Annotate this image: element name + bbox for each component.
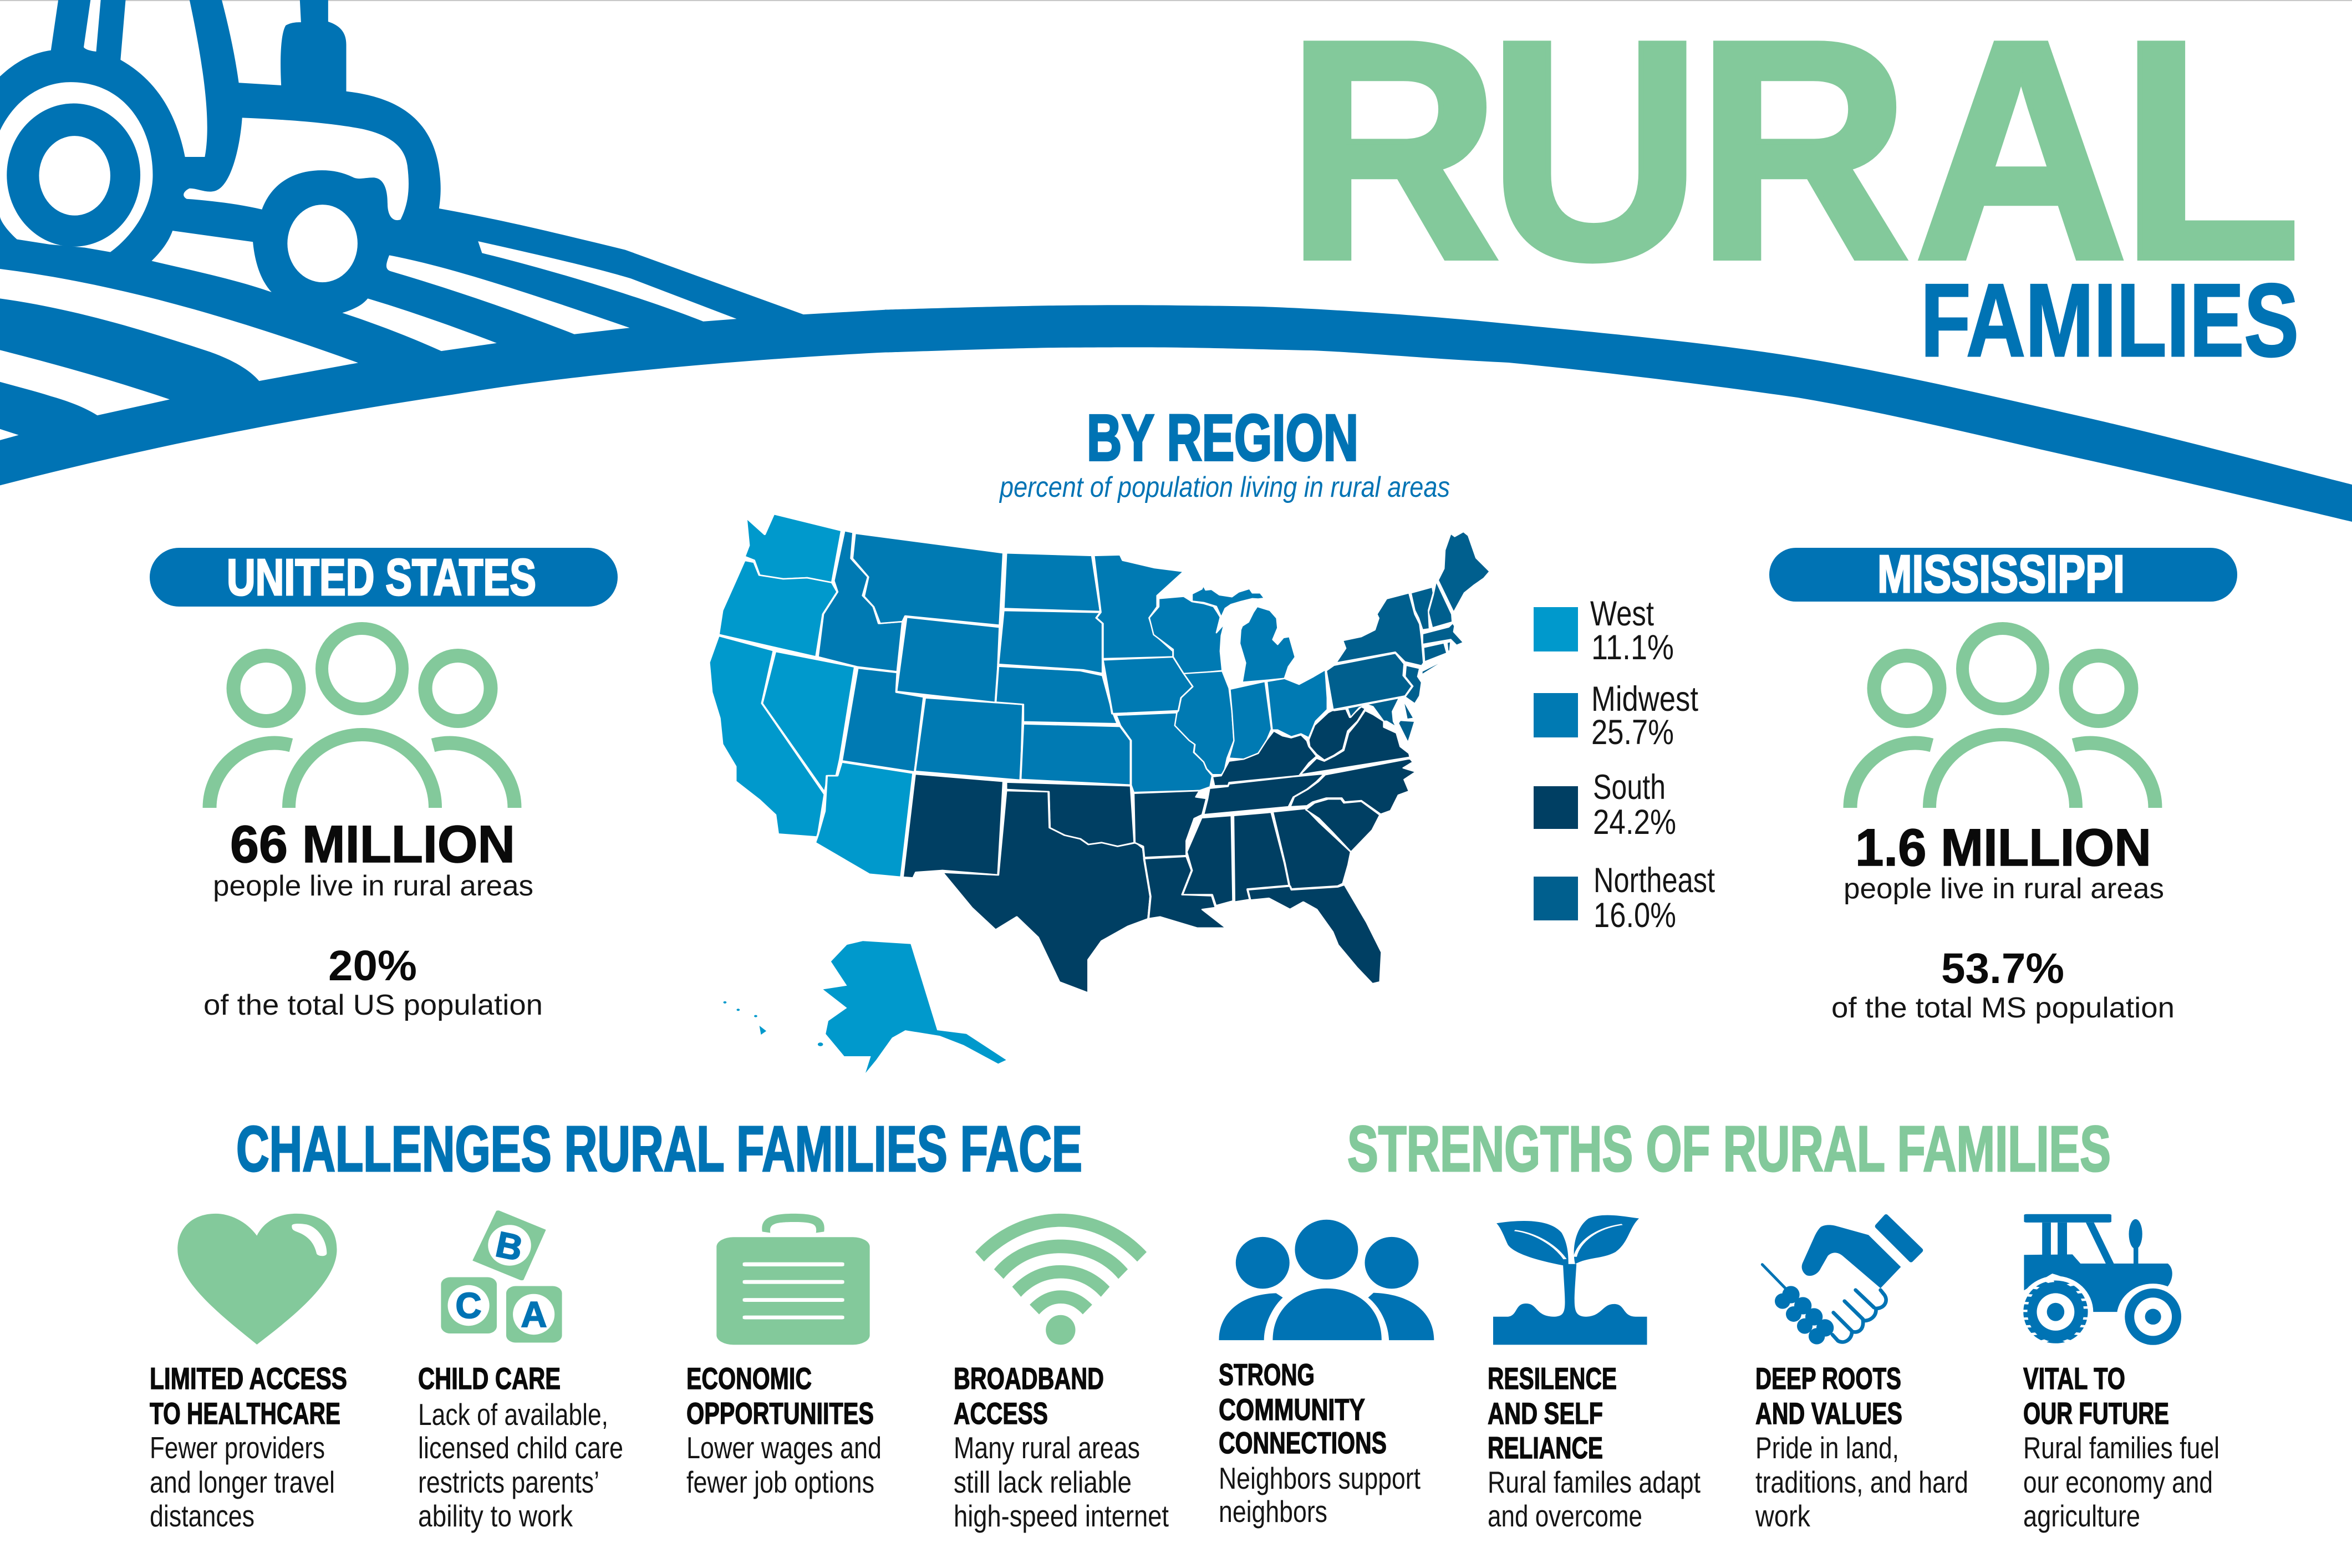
text: economic opportunities: OPPORTUNIITES [686, 1396, 874, 1430]
text: broadband access: Many rural areas [954, 1430, 1140, 1465]
text: resilience and self reliance: AND SELF [1488, 1396, 1603, 1430]
icon: tractor [2018, 1214, 2190, 1350]
text: limited access to healthcare: distances [150, 1499, 254, 1533]
text: vital to our future: OUR FUTURE [2023, 1396, 2169, 1430]
west states [709, 514, 1006, 1073]
stat: 53.7%: 53.7% [1941, 945, 2064, 992]
legend item: west: West [1590, 594, 1654, 633]
map west and central portion [709, 514, 1382, 1073]
text: strong community connections: CONNECTIONS [1219, 1426, 1387, 1460]
icon: handshake [1762, 1216, 1921, 1345]
text: vital to our future: our economy and [2023, 1465, 2213, 1499]
stat caption: of the total US population [203, 989, 543, 1021]
legend item: midwest [1534, 680, 1698, 752]
map: united states by region [709, 514, 1490, 1073]
text: child care: CHILD CARE [418, 1361, 561, 1396]
pill heading [1769, 544, 2237, 604]
text: strong community connections: COMMUNITY [1219, 1392, 1365, 1427]
map eastern portion [1149, 532, 1490, 852]
icon: heart [177, 1214, 337, 1345]
stat: 66 million: 66 MILLION [230, 815, 515, 874]
stat: 1.6 million: 1.6 MILLION [1855, 818, 2151, 877]
pill heading: UNITED STATES [227, 548, 536, 606]
text: limited access to healthcare: TO HEALTHCARE [150, 1396, 340, 1430]
panel: mississippi [1769, 544, 2237, 1024]
mountain and plains states [818, 531, 1213, 792]
front wheel hub [287, 205, 358, 282]
text: limited access to healthcare: Fewer providers [150, 1430, 325, 1465]
text: economic opportunities: Lower wages and [686, 1430, 882, 1465]
icon: alphabet blocks: A [521, 1294, 547, 1335]
tractor and hill silhouette [0, 0, 887, 485]
map subheading: percent of population living in rural areas [999, 471, 1450, 503]
text: child care: restricts parents’ [418, 1465, 599, 1499]
text: resilience and self reliance: Rural familes adapt [1488, 1465, 1701, 1499]
rear wheel [0, 82, 153, 252]
text: strong community connections: STRONG [1219, 1357, 1315, 1392]
text: strong community connections [1219, 1357, 1421, 1529]
text: deep roots and values: traditions, and hard [1755, 1465, 1968, 1499]
text: limited access to healthcare: and longer travel [150, 1465, 335, 1499]
icon: people outline [1850, 629, 2155, 808]
hood cut-out [184, 118, 409, 220]
text: vital to our future: agriculture [2023, 1499, 2140, 1533]
icon: community people [1219, 1220, 1434, 1340]
text: broadband access: ACCESS [954, 1396, 1048, 1430]
text: resilience and self reliance: RESILENCE [1488, 1361, 1617, 1396]
southern states [903, 774, 1382, 993]
great lakes states [1149, 586, 1327, 775]
legend item: south: 24.2% [1593, 803, 1676, 842]
text: vital to our future: Rural families fuel [2023, 1430, 2219, 1465]
icon: alphabet blocks: C [456, 1285, 481, 1326]
text: resilience and self reliance: RELIANCE [1488, 1430, 1603, 1465]
icon: sprout [1493, 1215, 1647, 1345]
illustration: tractor on plowed field [0, 0, 887, 485]
text: broadband access: still lack reliable [954, 1465, 1132, 1499]
pill heading: MISSISSIPPI [1877, 544, 2125, 604]
legend item: west: 11.1% [1591, 628, 1674, 667]
upper south states [1204, 706, 1416, 852]
stat caption: of the total MS population [1831, 992, 2175, 1024]
legend item: south [1534, 768, 1676, 842]
panel: united states [150, 548, 618, 1021]
text: vital to our future: VITAL TO [2023, 1361, 2125, 1396]
cab window slit [84, 0, 101, 52]
text: child care: licensed child care [418, 1430, 623, 1465]
text: deep roots and values [1755, 1361, 1968, 1533]
text: deep roots and values: Pride in land, [1755, 1430, 1899, 1465]
legend: regions [1534, 594, 1715, 935]
icon: alphabet blocks: B [492, 1224, 526, 1269]
text: economic opportunities: ECONOMIC [686, 1361, 812, 1396]
text: deep roots and values: DEEP ROOTS [1755, 1361, 1901, 1396]
text: deep roots and values: AND VALUES [1755, 1396, 1902, 1430]
text: deep roots and values: work [1755, 1499, 1810, 1533]
text: child care: Lack of available, [418, 1397, 608, 1432]
text: strong community connections: neighbors [1219, 1494, 1327, 1529]
text: economic opportunities [686, 1361, 882, 1499]
text: child care: ability to work [418, 1499, 573, 1533]
text: resilience and self reliance [1488, 1361, 1701, 1533]
legend item: northeast: 16.0% [1594, 896, 1676, 935]
legend item: midwest: 25.7% [1591, 713, 1674, 752]
stat caption: people live in rural areas [1844, 873, 2164, 905]
icon: alphabet blocks [441, 1211, 562, 1342]
text: limited access to healthcare [150, 1361, 347, 1533]
text: vital to our future [2023, 1361, 2219, 1533]
text: broadband access: high-speed internet [954, 1499, 1169, 1533]
text: limited access to healthcare: LIMITED ACCESS [150, 1361, 347, 1396]
icon: briefcase [716, 1214, 870, 1345]
text: broadband access [954, 1361, 1169, 1533]
heading: challenges: CHALLENGES RURAL FAMILIES FACE [236, 1113, 1082, 1185]
icon: wifi [975, 1214, 1147, 1345]
text: economic opportunities: fewer job options [686, 1465, 874, 1499]
text: resilience and self reliance: and overcome [1488, 1499, 1642, 1533]
northeast states [1326, 532, 1490, 742]
text: broadband access: BROADBAND [954, 1361, 1104, 1396]
stat caption: people live in rural areas [213, 870, 533, 902]
text: child care [418, 1361, 623, 1533]
legend item: south: South [1593, 768, 1666, 807]
legend item: midwest: Midwest [1591, 680, 1698, 719]
heading: by region: BY REGION [1087, 401, 1358, 475]
legend item: west [1534, 594, 1674, 667]
furrows [0, 231, 737, 440]
stat: 20%: 20% [328, 942, 417, 990]
hill band: right sweep [885, 305, 2352, 522]
icon: people outline [210, 629, 515, 808]
legend item: northeast: Northeast [1594, 861, 1715, 900]
legend item: northeast [1534, 861, 1715, 935]
text: strong community connections: Neighbors support [1219, 1461, 1421, 1495]
